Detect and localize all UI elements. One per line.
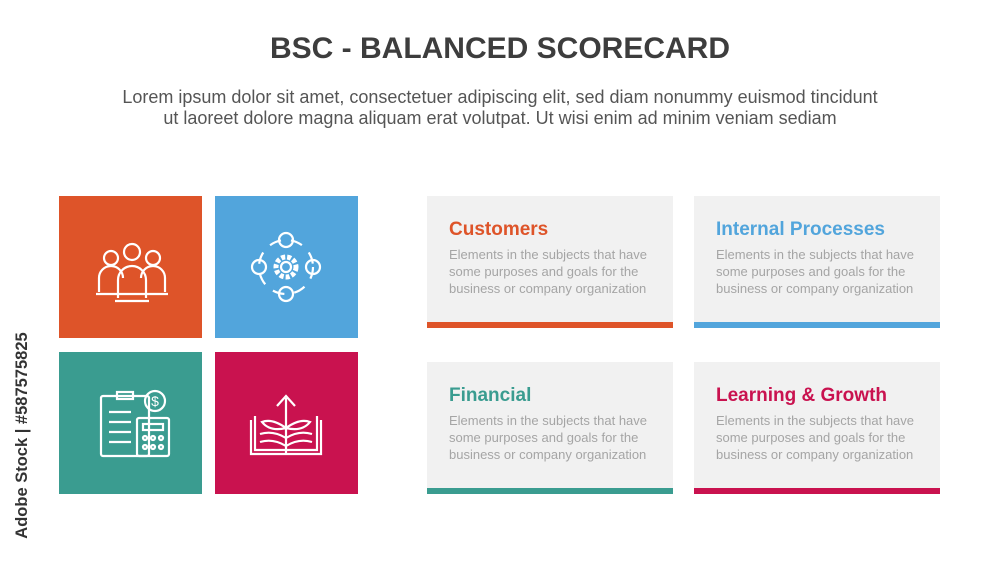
card: internal processes bbox=[694, 196, 940, 328]
card: learning & growth: Elements in the subjects that have some purposes and goals for the business or company organization bbox=[716, 413, 914, 462]
square: financial icon bbox=[59, 352, 202, 494]
subtitle: Lorem ipsum dolor sit amet, consectetuer adipiscing elit, sed diam nonummy euismod tincidunt bbox=[122, 87, 878, 107]
card: customers: Elements in the subjects that have some purposes and goals for the business or company organization bbox=[449, 247, 647, 296]
subtitle: ut laoreet dolore magna aliquam erat volutpat. Ut wisi enim ad minim veniam sediam bbox=[163, 108, 837, 128]
card: internal processes: Elements in the subjects that have some purposes and goals for the business or company organization bbox=[716, 247, 914, 296]
card: learning & growth bbox=[694, 362, 940, 494]
card: customers bbox=[427, 196, 673, 328]
card: customers: Customers bbox=[449, 219, 548, 240]
card: learning & growth: Learning & Growth bbox=[716, 385, 887, 406]
title: BSC - BALANCED SCORECARD bbox=[270, 32, 730, 65]
side credit: Adobe Stock | #587575825 bbox=[13, 332, 31, 539]
square: customers icon bbox=[59, 196, 202, 338]
subtitle bbox=[122, 87, 878, 128]
card: financial: Financial bbox=[449, 385, 531, 406]
card: financial: Elements in the subjects that have some purposes and goals for the business or company organization bbox=[449, 413, 647, 462]
square: internal processes icon bbox=[215, 196, 358, 338]
square: learning icon bbox=[215, 352, 358, 494]
square: financial icon: $ bbox=[151, 393, 159, 409]
card: internal processes: Internal Processes bbox=[716, 219, 885, 240]
card: financial bbox=[427, 362, 673, 494]
